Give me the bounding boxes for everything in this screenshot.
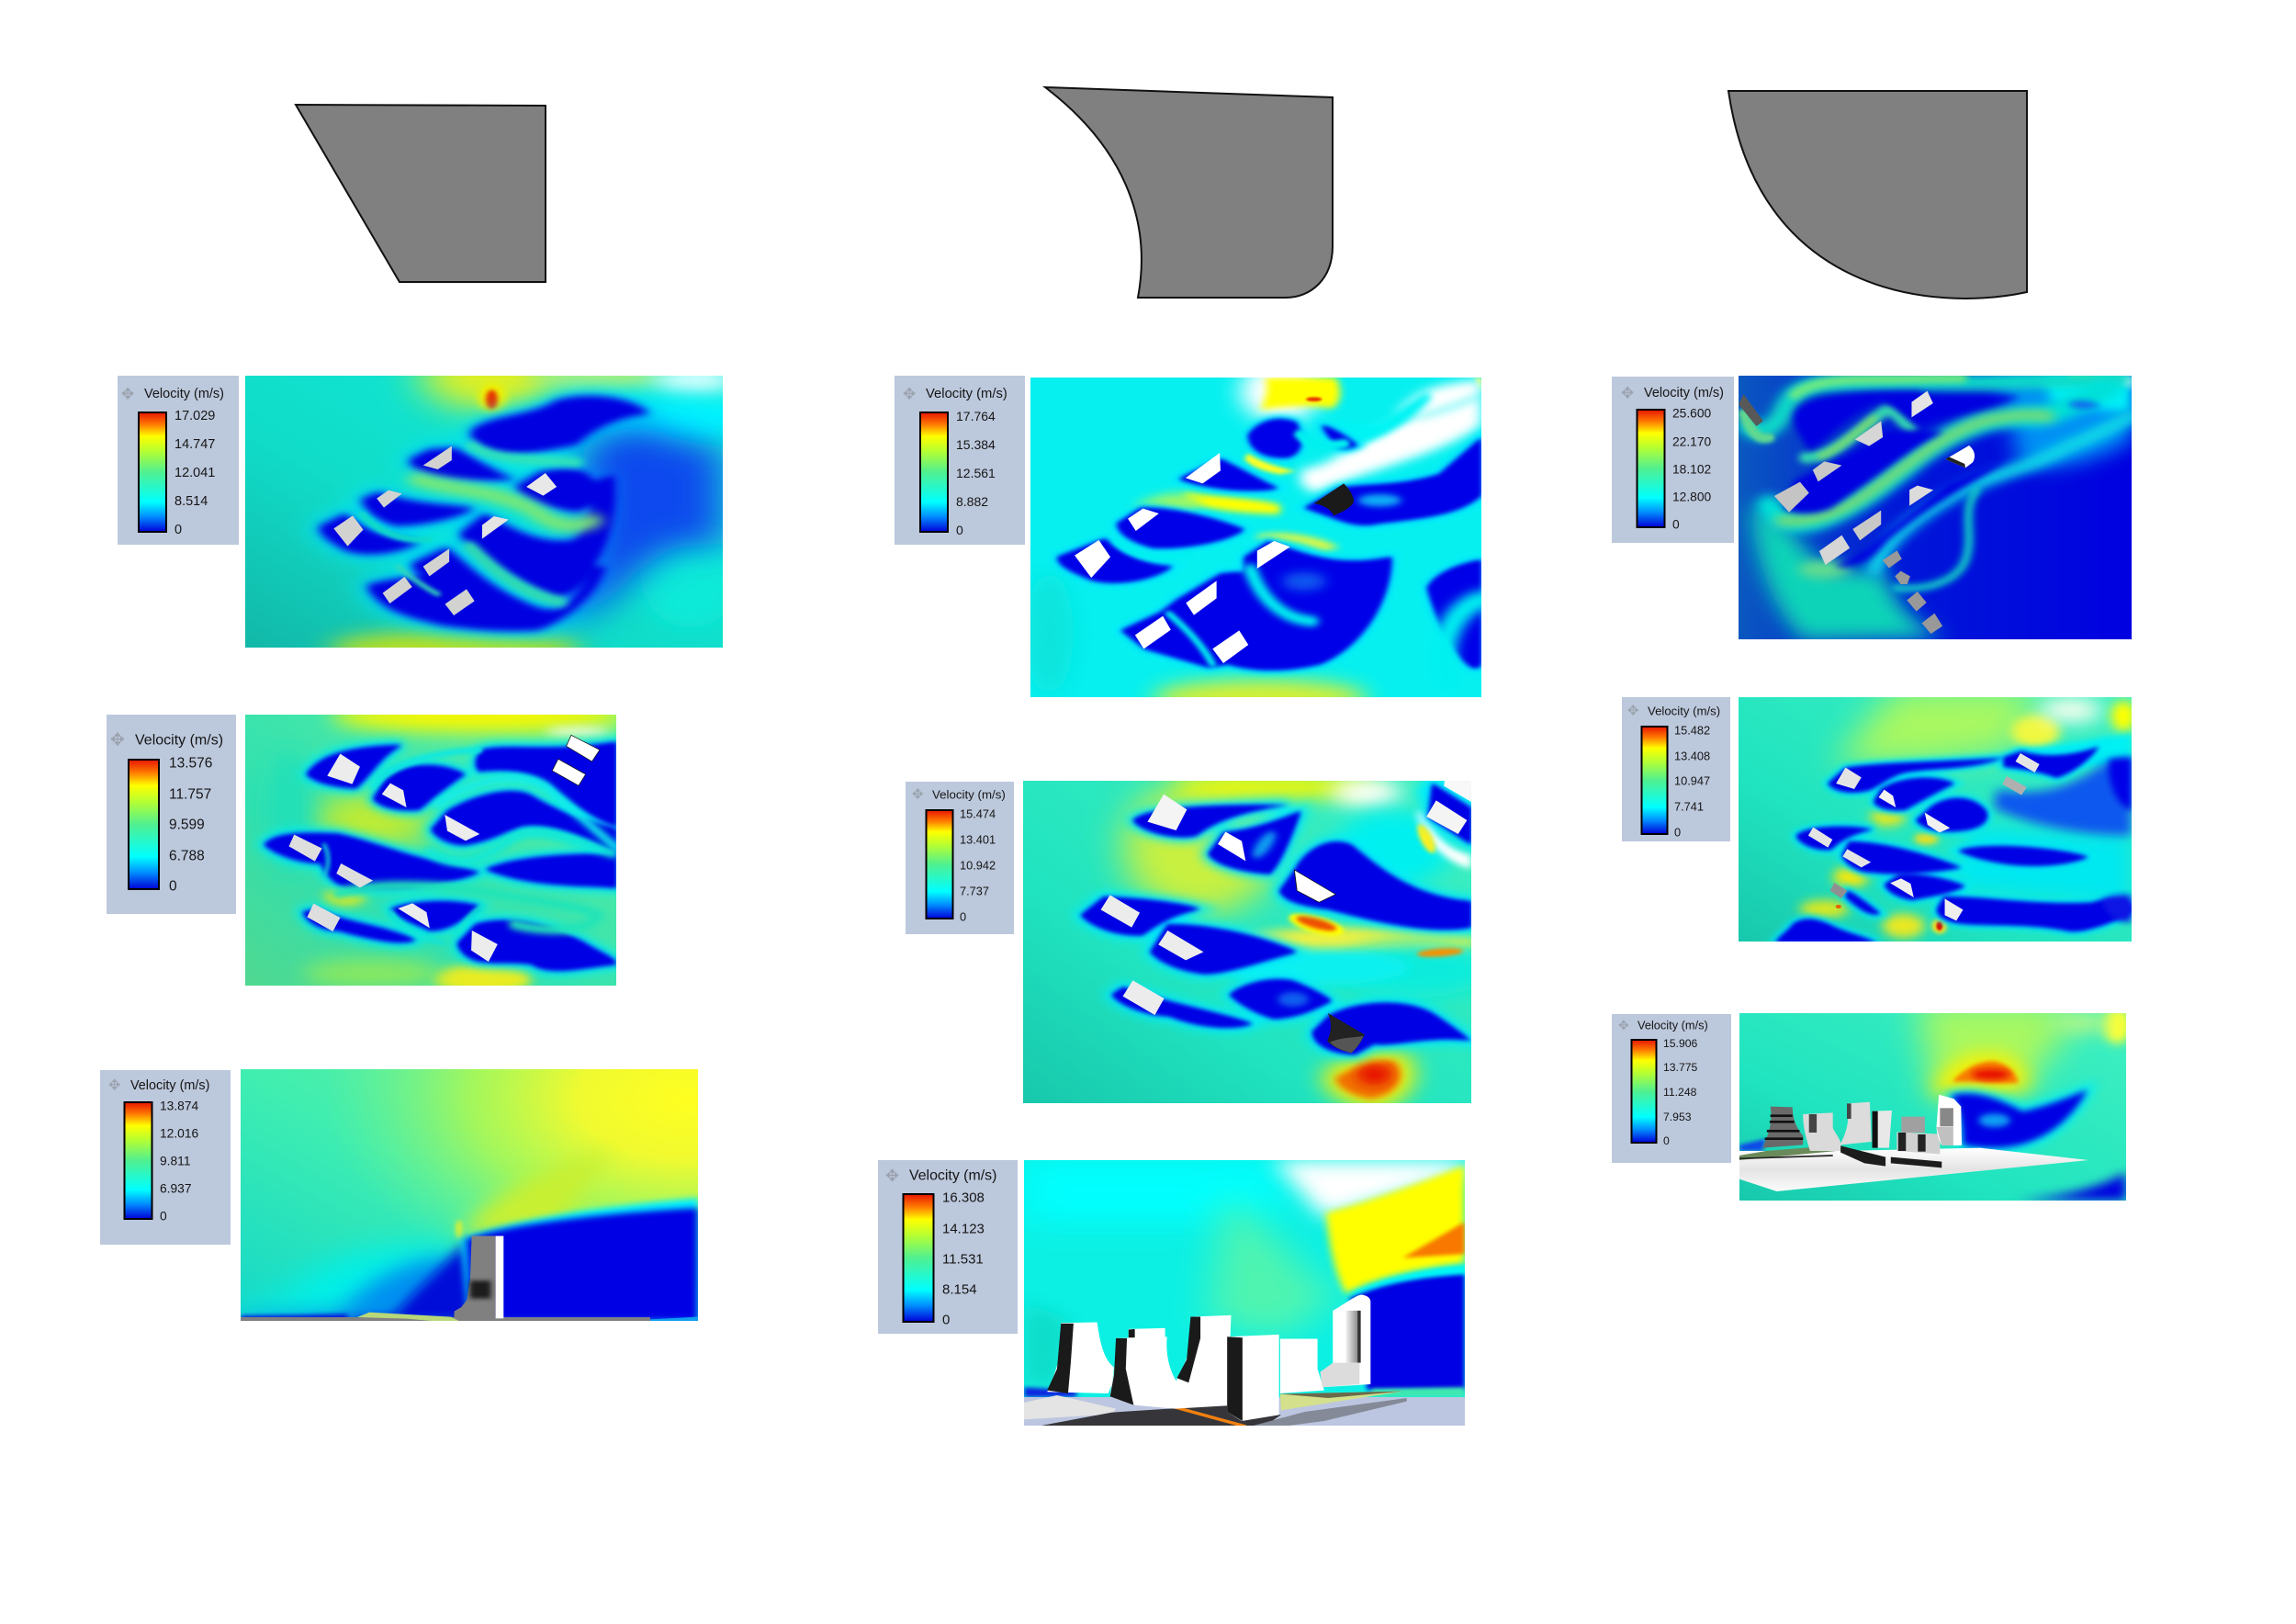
legend: velocity 15.474: Velocity (m/s) bbox=[932, 788, 1006, 801]
legend: velocity 17.029: 14.747 bbox=[174, 437, 215, 452]
legend: velocity 17.764: 17.764 bbox=[956, 409, 996, 423]
simulation panel: plan view, site 3, middle bbox=[1739, 697, 2132, 942]
legend: velocity 16.308: 11.531 bbox=[942, 1251, 984, 1268]
legend: velocity 15.474: 13.401 bbox=[960, 832, 996, 847]
flow field background bbox=[1739, 1001, 2132, 1201]
legend: velocity 15.906 bbox=[1612, 1014, 1731, 1163]
buildings bbox=[1075, 453, 1354, 663]
legend: velocity 15.906: Velocity (m/s) bbox=[1638, 1018, 1708, 1032]
buildings bbox=[1101, 781, 1471, 1053]
legend: velocity 15.482: 0 bbox=[1674, 825, 1681, 840]
legend: velocity 17.764: 0 bbox=[956, 523, 963, 537]
ground and terrain bbox=[241, 1313, 650, 1321]
legend: velocity 13.576: 0 bbox=[169, 878, 177, 895]
simulation panel: plan view, site 3, upper bbox=[1739, 376, 2132, 639]
floor plan: site shape 1 bbox=[296, 105, 546, 282]
simulation panel: perspective section, site 2 bbox=[1024, 1160, 1465, 1426]
legend: velocity 25.600: ✥ bbox=[1621, 384, 1634, 402]
legend: velocity 17.029: ✥ bbox=[121, 386, 134, 402]
wind wake zones bbox=[1775, 747, 2132, 942]
legend: velocity 25.600: 25.600 bbox=[1672, 406, 1712, 421]
legend: velocity 15.482: 15.482 bbox=[1674, 724, 1710, 737]
flow field background bbox=[1026, 361, 1481, 716]
legend: velocity 15.474: 0 bbox=[960, 909, 966, 924]
legend: velocity 25.600: 12.800 bbox=[1672, 491, 1712, 503]
buildings bbox=[1808, 753, 2040, 920]
air jets between buildings bbox=[1117, 434, 1481, 680]
floor plan: site shape 3 bbox=[1728, 91, 2027, 299]
legend: velocity 15.474: ✥ bbox=[912, 786, 924, 803]
legend: velocity 17.029: 0 bbox=[174, 523, 182, 537]
legend: velocity 25.600: 22.170 bbox=[1672, 435, 1712, 448]
legend: velocity 15.482: ✥ bbox=[1627, 704, 1639, 718]
legend: velocity 15.474 bbox=[906, 782, 1014, 934]
site ground plate bbox=[1739, 1147, 2088, 1191]
flow field background bbox=[245, 699, 626, 995]
legend: velocity 13.874 bbox=[100, 1070, 231, 1245]
building group bbox=[1047, 1295, 1370, 1421]
legend: velocity 15.906: 13.775 bbox=[1663, 1061, 1697, 1074]
legend: velocity 13.576: ✥ bbox=[110, 731, 125, 750]
air jets between buildings bbox=[324, 750, 616, 942]
legend: velocity 17.029: 12.041 bbox=[174, 466, 215, 480]
legend: velocity 16.308: 16.308 bbox=[942, 1190, 985, 1205]
simulation panel: section view, site 1 bbox=[241, 1069, 698, 1321]
legend: velocity 13.576: 9.599 bbox=[169, 818, 205, 832]
legend: velocity 15.482: Velocity (m/s) bbox=[1648, 704, 1720, 718]
tower section bbox=[455, 1236, 503, 1318]
legend: velocity 13.874: 9.811 bbox=[160, 1154, 191, 1168]
legend: velocity 15.482: 10.947 bbox=[1674, 773, 1710, 788]
legend: velocity 15.906: ✥ bbox=[1618, 1018, 1629, 1032]
legend: velocity 15.482: 13.408 bbox=[1674, 750, 1710, 762]
wind wake zones bbox=[1784, 392, 2102, 567]
legend: velocity 13.874: Velocity (m/s) bbox=[130, 1078, 209, 1093]
wind wake zones bbox=[241, 1199, 698, 1321]
wind wake zones bbox=[320, 397, 723, 630]
legend: velocity 15.906: 11.248 bbox=[1663, 1086, 1697, 1099]
simulation panel: perspective section, site 3 bbox=[1739, 1013, 2126, 1201]
legend: velocity 17.764: ✥ bbox=[903, 386, 916, 402]
legend: velocity 13.874: 13.874 bbox=[160, 1099, 199, 1113]
wind wake zones bbox=[1024, 1266, 1465, 1397]
flow field background bbox=[1024, 1160, 1465, 1426]
legend: velocity 13.874: ✥ bbox=[108, 1078, 120, 1093]
flow field background bbox=[1739, 376, 2132, 639]
simulation panel: plan view, site 1, upper bbox=[245, 376, 723, 648]
legend: velocity 13.576: Velocity (m/s) bbox=[135, 733, 223, 748]
air jets bbox=[1744, 378, 2132, 589]
legend: velocity 25.600 bbox=[1612, 377, 1734, 543]
simulation panel: plan view, site 2, upper bbox=[1030, 378, 1481, 697]
legend: velocity 13.874: 12.016 bbox=[160, 1126, 199, 1141]
floor plan: site shape 2 bbox=[1045, 87, 1333, 298]
wind wake zones bbox=[1057, 419, 1481, 670]
simulation panel: plan view, site 2, middle bbox=[1023, 781, 1471, 1103]
legend: velocity 15.474: 10.942 bbox=[960, 858, 996, 873]
legend: velocity 17.029: 8.514 bbox=[174, 494, 208, 509]
air jets between buildings bbox=[362, 445, 594, 602]
legend: velocity 15.482: 7.741 bbox=[1674, 799, 1704, 814]
flow field background bbox=[241, 1069, 698, 1321]
wind wake zone bbox=[1951, 1089, 2088, 1148]
legend: velocity 15.474: 7.737 bbox=[960, 884, 989, 898]
legend: velocity 15.474: 15.474 bbox=[960, 806, 996, 821]
legend: velocity 17.764 bbox=[895, 376, 1025, 545]
legend: velocity 13.576: 13.576 bbox=[169, 755, 212, 772]
buildings bbox=[289, 735, 600, 962]
legend: velocity 16.308: ✥ bbox=[885, 1167, 899, 1185]
legend: velocity 16.308 bbox=[878, 1160, 1018, 1334]
legend: velocity 25.600: 0 bbox=[1672, 518, 1680, 531]
buildings bbox=[1739, 391, 1975, 634]
legend: velocity 15.906: 15.906 bbox=[1663, 1037, 1697, 1050]
legend: velocity 17.764: 12.561 bbox=[956, 466, 996, 480]
legend: velocity 13.576: 11.757 bbox=[169, 786, 211, 803]
legend: velocity 16.308: 14.123 bbox=[942, 1222, 985, 1236]
legend: velocity 15.482 bbox=[1622, 697, 1730, 841]
legend: velocity 17.029 bbox=[118, 376, 239, 545]
legend: velocity 17.029: 17.029 bbox=[174, 409, 215, 423]
legend: velocity 13.576 bbox=[107, 715, 236, 914]
buildings bbox=[333, 446, 557, 615]
legend: velocity 16.308: 8.154 bbox=[942, 1282, 977, 1297]
wind wake zones bbox=[1081, 784, 1471, 1054]
legend: velocity 15.906: 7.953 bbox=[1663, 1111, 1692, 1123]
flow field background bbox=[245, 343, 759, 668]
flow field background bbox=[1739, 689, 2136, 942]
simulation panel: plan view, site 1, middle bbox=[245, 715, 616, 986]
legend: velocity 13.874: 0 bbox=[160, 1209, 167, 1224]
legend: velocity 17.029: Velocity (m/s) bbox=[144, 387, 224, 401]
legend: velocity 17.764: Velocity (m/s) bbox=[926, 387, 1007, 401]
legend: velocity 25.600: Velocity (m/s) bbox=[1644, 386, 1724, 400]
legend: velocity 15.906: 0 bbox=[1663, 1134, 1670, 1147]
legend: velocity 16.308: Velocity (m/s) bbox=[909, 1168, 996, 1183]
legend: velocity 13.576: 6.788 bbox=[169, 849, 205, 863]
ground and roads bbox=[1024, 1392, 1465, 1427]
flow field background bbox=[1023, 774, 1491, 1103]
legend: velocity 16.308: 0 bbox=[942, 1312, 950, 1328]
legend: velocity 17.764: 8.882 bbox=[956, 494, 988, 509]
legend: velocity 13.874: 6.937 bbox=[160, 1181, 192, 1196]
building group bbox=[1762, 1095, 1962, 1167]
legend: velocity 25.600: 18.102 bbox=[1672, 463, 1711, 476]
wind wake zones bbox=[264, 742, 616, 970]
legend: velocity 17.764: 15.384 bbox=[956, 437, 996, 452]
